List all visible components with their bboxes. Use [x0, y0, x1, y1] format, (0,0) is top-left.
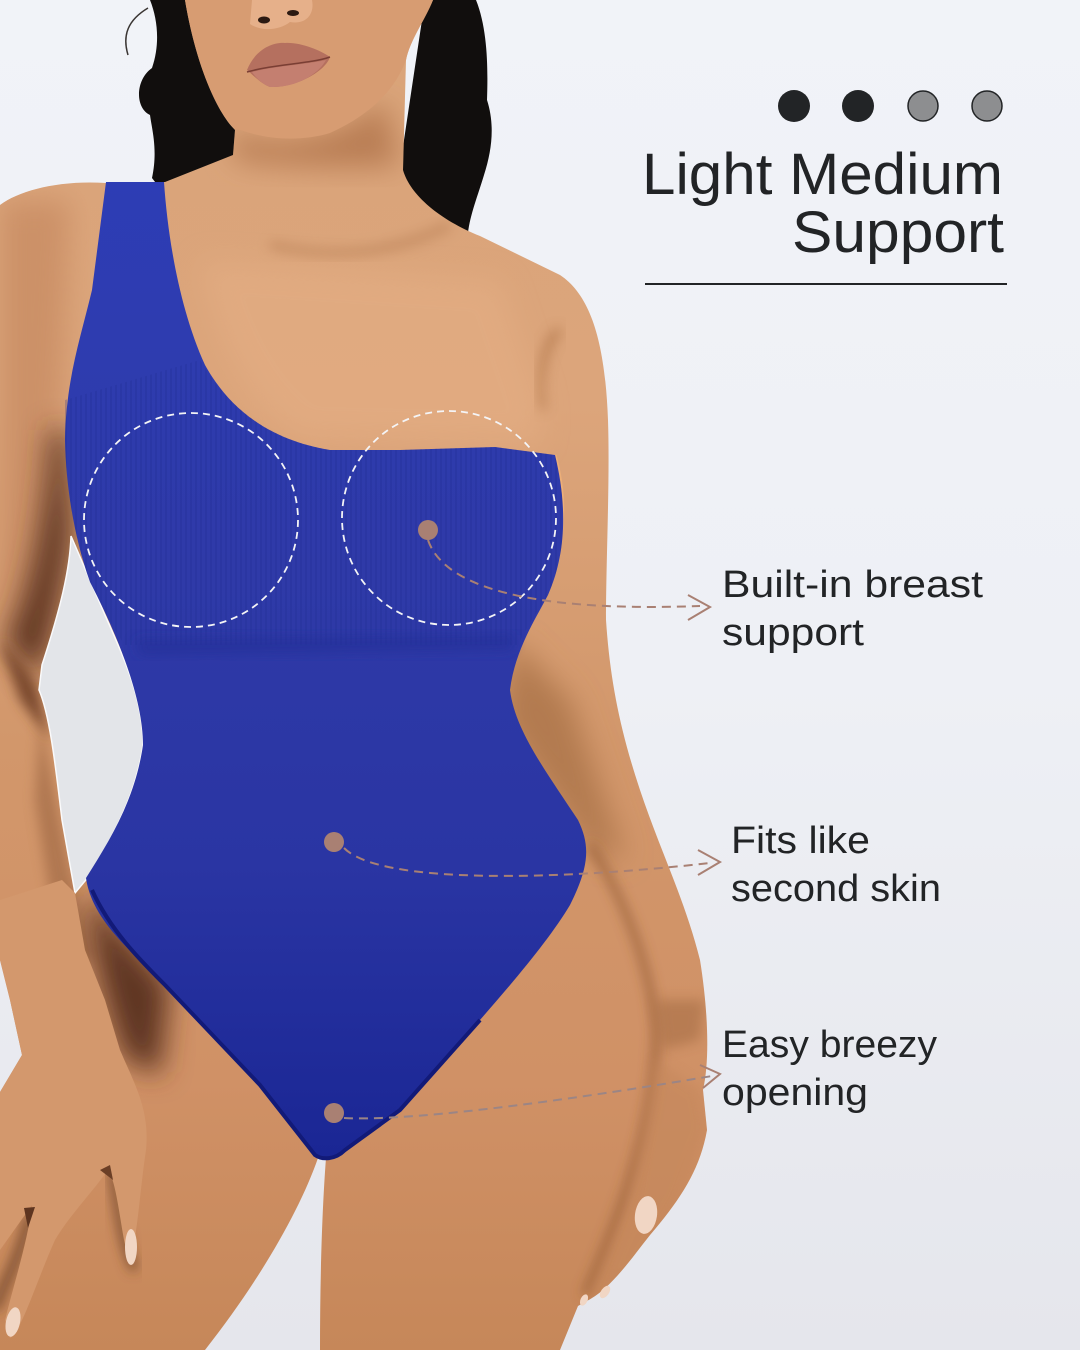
callout: fits like second skin — [324, 820, 941, 910]
bodysuit — [65, 182, 586, 1158]
neck and chest highlight — [200, 260, 540, 445]
background gap between left arm and torso — [39, 536, 143, 893]
rating dots — [778, 90, 1002, 122]
dark edge of leg opening — [92, 890, 480, 1158]
hair — [139, 0, 492, 240]
callout: built-in breast support — [418, 520, 983, 654]
rib texture on chest — [65, 400, 562, 590]
nose — [250, 0, 313, 29]
face — [185, 0, 433, 139]
nails — [3, 1195, 660, 1338]
callout: easy breezy opening: opening — [722, 1072, 868, 1114]
callout: fits like second skin: Fits like — [731, 820, 870, 862]
skin shading — [0, 100, 707, 1310]
waist seam shadow — [135, 635, 515, 655]
lips — [247, 43, 330, 87]
callout: built-in breast support: support — [722, 612, 864, 654]
title — [642, 142, 1004, 265]
left wrist and hand — [0, 880, 147, 1338]
callout: built-in breast support: Built-in breast — [722, 564, 983, 606]
skin: body, arms and legs — [0, 0, 707, 1350]
title rule — [645, 283, 1007, 285]
callout: easy breezy opening — [324, 1024, 937, 1123]
title: Support — [792, 200, 1004, 265]
stray hair curl — [126, 8, 148, 55]
callout: easy breezy opening: Easy breezy — [722, 1024, 937, 1066]
photo: model wearing one-shoulder bodysuit — [0, 0, 707, 1350]
title: Light Medium — [642, 142, 1003, 207]
callout: fits like second skin: second skin — [731, 868, 941, 910]
dashed breast circles — [84, 411, 556, 627]
